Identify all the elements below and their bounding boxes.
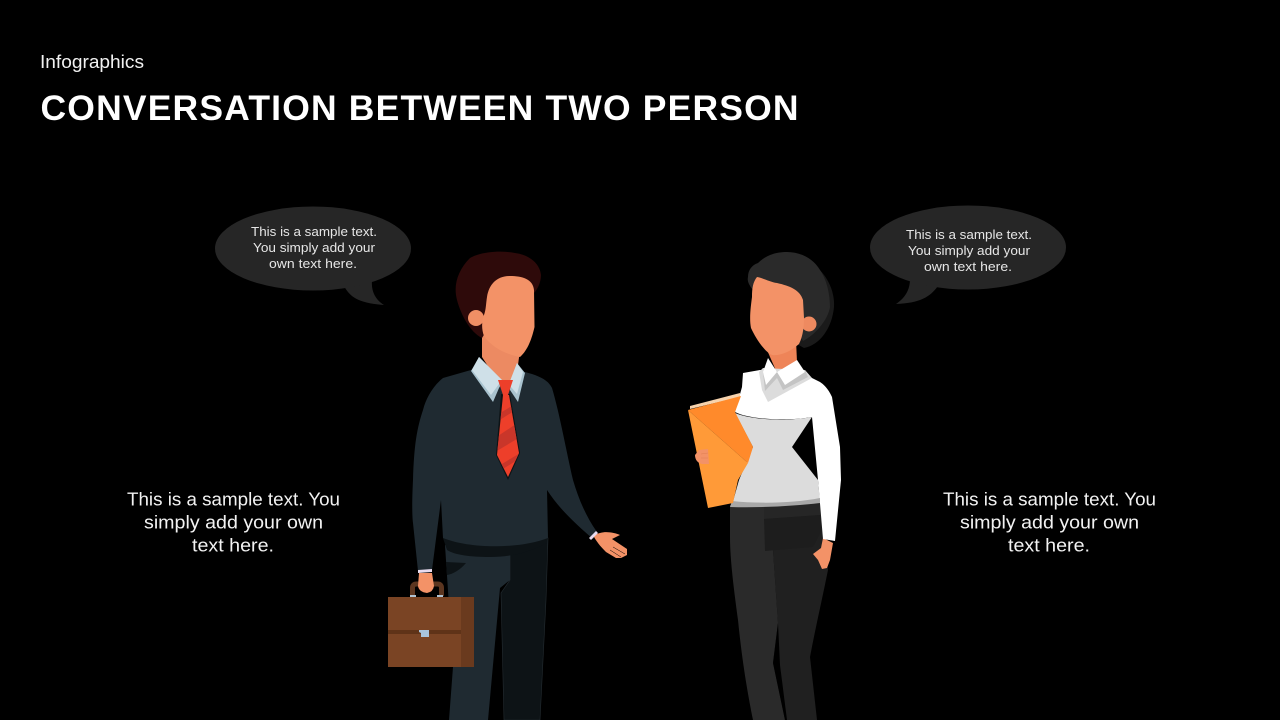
man: trouser pocket: [446, 562, 466, 575]
speech bubble: woman: own text here.: [924, 259, 1012, 274]
man: tie: [496, 380, 520, 480]
man figure: [388, 252, 627, 720]
speech bubble: woman: This is a sample text.: [906, 227, 1032, 242]
man: briefcase: [388, 584, 474, 667]
woman: trousers: [730, 503, 828, 720]
man: hair: [456, 252, 541, 338]
text block: left: simply add your own: [144, 512, 323, 532]
man: face: [482, 276, 534, 357]
woman: back hair: [790, 262, 834, 348]
title: CONVERSATION BETWEEN TWO PERSON: [40, 88, 798, 128]
speech bubble: woman: [870, 206, 1066, 304]
speech bubble: man: This is a sample text.: [251, 224, 377, 239]
text block: left: This is a sample text. You: [127, 490, 340, 510]
man: left hand: [418, 569, 434, 593]
eyebrow label: Infographics: [40, 52, 144, 72]
man: belt shadow: [443, 538, 548, 557]
woman figure: [688, 252, 841, 720]
text block: left: [127, 490, 340, 556]
woman: left hand: [695, 449, 709, 464]
text block: right: simply add your own: [960, 512, 1139, 532]
text block: right: text here.: [1008, 536, 1090, 556]
man: right hand: [589, 531, 627, 558]
man: dark trouser leg: [501, 538, 548, 720]
man: sweater: [412, 370, 597, 571]
man: neck: [482, 325, 520, 385]
man: shirt collar: [471, 357, 525, 402]
woman: folder: [688, 393, 753, 508]
man: ear: [468, 310, 484, 326]
woman: waistband: [730, 498, 820, 507]
woman: shirt: [735, 358, 841, 541]
woman: corset: [732, 413, 820, 505]
woman: ear: [802, 316, 816, 332]
text block: right: [943, 490, 1156, 556]
woman: right hand: [813, 538, 833, 569]
woman: neck: [767, 340, 797, 373]
speech bubble: man: [215, 206, 411, 305]
speech bubble: woman: You simply add your: [908, 243, 1031, 258]
speech bubble: man: You simply add your: [253, 240, 376, 255]
woman: face: [750, 277, 804, 355]
woman: main hair: [748, 252, 830, 341]
text block: left: text here.: [192, 536, 274, 556]
man: light trouser leg: [445, 545, 510, 720]
speech bubble: man: own text here.: [269, 256, 357, 271]
text block: right: This is a sample text. You: [943, 490, 1156, 510]
